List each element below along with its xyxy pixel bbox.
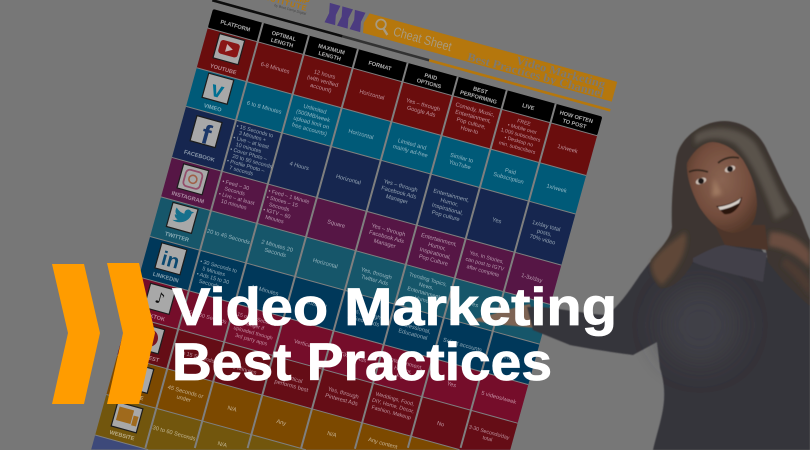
row: facebook cells: Yes – through bbox=[383, 179, 418, 194]
purple chevrons bbox=[325, 3, 366, 32]
face bbox=[687, 142, 757, 233]
platform labels: WEBSITE bbox=[109, 430, 135, 443]
row: instagram cells: Pop Culture bbox=[418, 254, 449, 268]
row: linkedin cells bbox=[194, 259, 523, 373]
platform labels: VIMEO bbox=[203, 103, 223, 114]
row: tiktok cells: uploaded through bbox=[233, 325, 273, 342]
icon: vimeo bbox=[202, 73, 234, 105]
row: linkedin cells: Horizontal bbox=[301, 298, 327, 311]
orange banner: Cheat Sheet bbox=[392, 24, 454, 54]
row: vimeo cells: Paid bbox=[504, 168, 517, 177]
row: facebook cells: 10 minutes bbox=[235, 142, 262, 155]
row: instagram cells: Facebook Ads bbox=[368, 230, 405, 245]
platform icons bbox=[111, 34, 245, 433]
platform labels: MOBILE bbox=[121, 391, 144, 402]
row: website cells bbox=[152, 423, 228, 450]
row: linkedin cells: Seconds bbox=[198, 279, 220, 290]
row: tiktok cells: 3rd party apps bbox=[234, 333, 268, 348]
row: linkedin cells: LinkedIn Ads bbox=[347, 314, 380, 329]
row: instagram cells: Square bbox=[326, 219, 346, 230]
row: twitter cells: Yes, through bbox=[360, 267, 392, 281]
row: youtube cells: Horizontal bbox=[359, 89, 385, 102]
row: instagram cells: after complete bbox=[466, 264, 500, 279]
row: twitter cells: Trending Topics, bbox=[408, 272, 448, 288]
row: twitter cells: Humor bbox=[414, 295, 431, 305]
row: tiktok cells: 5 videos/week bbox=[480, 391, 517, 406]
row: youtube cells: Google Ads bbox=[406, 105, 436, 119]
row: instagram cells: • IGTV – 60 bbox=[262, 207, 291, 221]
grid lines bbox=[95, 9, 602, 450]
icon: linkedin bbox=[155, 243, 187, 275]
orange banner bbox=[361, 13, 617, 103]
row: tiktok cells: Entertainment, bbox=[386, 356, 424, 372]
row: instagram cells: • Live – at least bbox=[218, 191, 255, 207]
row: facebook cells: Pop culture bbox=[431, 210, 460, 223]
row: orange cells: N/A bbox=[227, 405, 237, 414]
header row: BEST bbox=[472, 86, 489, 96]
row: facebook cells: 20 to 90 seconds bbox=[232, 154, 273, 170]
title: Best Practices bbox=[172, 333, 552, 392]
header row: TO POST bbox=[562, 118, 587, 131]
row: facebook cells: • Cover Photo – bbox=[229, 147, 267, 163]
platform labels: TIKTOK bbox=[144, 312, 165, 323]
row: twitter cells: 3-5x/day bbox=[509, 312, 532, 324]
collar bbox=[693, 245, 767, 282]
platform labels: YOUTUBE bbox=[209, 63, 237, 77]
title bbox=[172, 278, 617, 392]
row: vimeo cells: Similar to bbox=[449, 153, 474, 165]
row: youtube cells: How-to bbox=[460, 125, 479, 136]
header row: LENGTH bbox=[318, 51, 341, 63]
row: linkedin cells: Educational bbox=[398, 328, 428, 342]
row: vimeo cells: Unlimited bbox=[303, 104, 327, 116]
row: twitter cells bbox=[204, 217, 535, 333]
arrow: right chevron bbox=[107, 263, 155, 404]
row: vimeo cells bbox=[244, 89, 571, 203]
icon: twitter bbox=[166, 202, 198, 233]
logo: by Boot Camp Digital bbox=[274, 3, 307, 16]
row: instagram cells: • Stories – 15 bbox=[266, 195, 298, 209]
row: instagram cells: • Feed – 30 bbox=[221, 179, 250, 192]
row: tiktok cells: Vertical bbox=[293, 339, 313, 349]
row: youtube cells: • Mobile over bbox=[507, 122, 538, 136]
row: facebook cells: 4 Hours bbox=[289, 161, 310, 172]
header row: FORMAT bbox=[368, 60, 392, 73]
icon: tiktok: ♪ bbox=[153, 288, 167, 308]
row: youtube cells: Comedy, Music, bbox=[455, 102, 495, 119]
row: tiktok cells: 15 to 60 Seconds bbox=[185, 309, 227, 326]
icon: youtube bbox=[213, 34, 245, 65]
row: vimeo cells: Subscription bbox=[493, 172, 524, 186]
row: vimeo cells: YouTube bbox=[448, 160, 471, 171]
platform labels: LINKEDIN bbox=[152, 272, 179, 285]
icon: instagram bbox=[177, 164, 209, 195]
row: pinterest cells: Weddings, Food, bbox=[375, 391, 415, 408]
icon: linkedin: in bbox=[159, 248, 182, 274]
row: facebook cells: • Profile Photo – bbox=[226, 158, 265, 174]
hair bbox=[650, 121, 810, 306]
row: orange cells bbox=[165, 382, 398, 450]
cheat sheet poster bbox=[88, 0, 618, 450]
row: facebook cells: Yes bbox=[491, 217, 502, 225]
icon: mobile video bbox=[122, 362, 154, 393]
row: facebook cells: 1x/day total bbox=[531, 220, 561, 233]
row: instagram cells: Minutes bbox=[265, 215, 285, 225]
row: youtube cells: Pop culture, bbox=[456, 117, 487, 131]
row: twitter cells: 2 Minutes 20 bbox=[260, 239, 293, 254]
row: facebook cells: 70% video bbox=[529, 234, 556, 247]
row: orange cells: 45 Seconds or bbox=[167, 385, 204, 400]
row: vimeo cells: upload limit on bbox=[293, 116, 330, 131]
icon: pinterest bbox=[133, 323, 165, 354]
platform labels: PINTEREST bbox=[128, 350, 160, 364]
row: tiktok cells: 15 or 60 Seconds bbox=[236, 312, 277, 328]
row: facebook cells: Humor, bbox=[440, 198, 459, 208]
row: facebook cells: 7 seconds bbox=[228, 165, 254, 178]
header row: OPTIONS bbox=[416, 78, 442, 91]
row: youtube cells: min. subscribers bbox=[498, 140, 536, 156]
orange banner: Video Marketing bbox=[515, 55, 607, 91]
row: vimeo cells: mainly ad-free bbox=[392, 144, 428, 159]
icon: facebook bbox=[189, 116, 222, 152]
row: vimeo cells: 6 to 8 Minutes bbox=[246, 101, 282, 116]
row: pinterest cells: DIY, Home, Decor, bbox=[371, 398, 415, 415]
row: vimeo cells: Limited and bbox=[397, 138, 427, 152]
row: tiktok cells: Yes bbox=[446, 381, 457, 389]
row: instagram cells: 1-3x/day bbox=[520, 273, 543, 285]
row: pinterest cells: Vertical bbox=[283, 374, 303, 385]
platform labels: INSTAGRAM bbox=[171, 191, 205, 206]
row: website cells: N/A bbox=[217, 441, 228, 449]
row: website cells: 30 to 60 Seconds bbox=[152, 425, 196, 443]
platform labels bbox=[105, 63, 240, 444]
row: tiktok cells: TikTok Ads bbox=[339, 351, 367, 365]
header row: LIVE bbox=[521, 103, 535, 112]
header row: LENGTH bbox=[270, 38, 294, 50]
row: twitter cells: Seconds bbox=[264, 248, 287, 259]
icon: tiktok bbox=[144, 283, 176, 314]
row: facebook cells: • Live – at least bbox=[233, 135, 270, 151]
row: youtube cells: 6-8 Minutes bbox=[260, 62, 290, 76]
platform labels: TWITTER bbox=[164, 231, 190, 244]
mouth bbox=[716, 197, 742, 214]
row: youtube cells: (with verified bbox=[306, 75, 339, 89]
row: pinterest cells: Yes, through bbox=[327, 386, 359, 401]
row: youtube cells: • Desktop no bbox=[504, 135, 534, 149]
arrow: left chevron bbox=[52, 264, 100, 404]
row: youtube cells: FREE bbox=[516, 118, 532, 128]
row: facebook cells: Inspirational, bbox=[431, 203, 464, 217]
icon: website bbox=[111, 402, 143, 433]
row: instagram cells: Yes – through bbox=[371, 223, 406, 238]
row: youtube cells: Entertainment, bbox=[454, 109, 492, 125]
row: twitter cells: News, bbox=[418, 282, 435, 292]
eyebrows bbox=[689, 157, 739, 172]
icon: facebook: f bbox=[198, 119, 216, 151]
row: pinterest cells: Pinterest Ads bbox=[324, 393, 358, 408]
row: linkedin cells: • Ads 15 to 30 bbox=[196, 271, 230, 286]
row: youtube cells: 1,000 subscribers bbox=[500, 127, 541, 144]
row: twitter cells: Twitter Ads bbox=[360, 274, 389, 287]
icon: magnifier bbox=[374, 18, 391, 35]
row: youtube cells bbox=[257, 48, 582, 167]
row: vimeo cells: Horizontal bbox=[348, 129, 374, 141]
row: orange cells: N/A bbox=[326, 431, 337, 439]
row: linkedin cells: 10 Minutes bbox=[250, 284, 279, 298]
icon: vimeo: v bbox=[208, 76, 228, 104]
row: linkedin cells: Professional, bbox=[398, 321, 432, 336]
nose bbox=[712, 178, 722, 197]
row: linkedin cells: 5x/week bbox=[499, 353, 521, 364]
row: pinterest cells: Fashion, Makeup bbox=[371, 405, 412, 421]
platform labels: FACEBOOK bbox=[183, 150, 215, 164]
row: linkedin cells: 5 Minutes bbox=[201, 266, 226, 278]
chest shading bbox=[660, 285, 740, 365]
row: facebook cells: 3 Minutes + bbox=[238, 130, 267, 144]
row: vimeo cells: free accounts) bbox=[291, 122, 327, 138]
row: instagram cells: Seconds bbox=[224, 186, 246, 198]
row: tiktok cells: Fun bbox=[395, 373, 407, 382]
eyes bbox=[695, 176, 707, 186]
header row: MAXIMUM bbox=[317, 43, 346, 57]
row: twitter cells: Yes bbox=[468, 301, 479, 309]
row: linkedin cells: Select accounts bbox=[442, 337, 483, 354]
header row: PERFORMING bbox=[459, 90, 497, 106]
row: vimeo cells: (500MB/week bbox=[295, 109, 331, 124]
top rule bbox=[212, 0, 611, 112]
row: instagram cells: Inspirational, bbox=[419, 247, 452, 261]
title: Video Marketing bbox=[172, 278, 617, 337]
hand bbox=[470, 304, 536, 328]
row: instagram cells: Humor, bbox=[427, 242, 447, 253]
row: pinterest cells bbox=[175, 337, 512, 449]
row: facebook cells: Facebook Ads bbox=[380, 185, 417, 201]
header row bbox=[218, 17, 593, 132]
row: pinterest cells: 15 Minutes bbox=[229, 363, 257, 377]
row: instagram cells: can post to IGTV bbox=[465, 256, 505, 273]
row: facebook cells: Horizontal bbox=[335, 174, 361, 187]
header row: HOW OFTEN bbox=[559, 110, 593, 125]
person bbox=[470, 121, 810, 450]
row: linkedin cells: Yes, through bbox=[349, 307, 381, 322]
row: instagram cells: Entertainment, bbox=[420, 233, 458, 249]
row: twitter cells: 20 to 45 Seconds bbox=[206, 229, 251, 246]
row: facebook cells: Manager bbox=[385, 194, 408, 206]
neck bbox=[715, 225, 768, 250]
row: tiktok cells bbox=[182, 298, 520, 416]
chevron arrows bbox=[52, 263, 155, 404]
row: orange cells: Any bbox=[276, 419, 287, 427]
row: youtube cells: 12 hours bbox=[313, 69, 336, 81]
header row: OPTIMAL bbox=[271, 31, 297, 43]
row: pinterest cells: total bbox=[482, 435, 493, 443]
row: orange cells: under bbox=[176, 394, 191, 404]
row: vimeo cells: 1x/week bbox=[546, 183, 567, 195]
row: youtube cells: account) bbox=[309, 83, 332, 94]
row: instagram cells: • Feed – 1 Minute bbox=[268, 188, 310, 206]
row: youtube cells: Yes – through bbox=[405, 98, 441, 113]
hair streaks bbox=[652, 128, 810, 296]
row: tiktok cells: longer if bbox=[245, 321, 265, 332]
row: facebook cells: Entertainment, bbox=[432, 188, 470, 204]
row: youtube cells: 1x/week bbox=[556, 144, 578, 155]
row: facebook cells bbox=[225, 124, 565, 260]
row: tiktok cells: Humor, bbox=[393, 365, 413, 376]
row: instagram cells: Manager bbox=[373, 238, 396, 250]
row: facebook cells: posts, bbox=[536, 228, 553, 238]
header row: PAID bbox=[424, 73, 438, 82]
row: pinterest cells: 6 to 15 Seconds bbox=[176, 349, 215, 365]
row: pinterest cells: performs best bbox=[274, 379, 309, 394]
row: instagram cells: Yes, In Stories, bbox=[469, 250, 504, 266]
orange banner: Best Practices by Channel bbox=[466, 51, 605, 100]
table rows bbox=[91, 9, 602, 450]
row: linkedin cells: • 30 Seconds to bbox=[199, 259, 237, 275]
row: pinterest cells: No bbox=[436, 421, 445, 429]
row: instagram cells bbox=[215, 176, 547, 296]
row: pinterest cells: 3-30 Seconds/day bbox=[468, 424, 510, 441]
row: twitter cells: Horizontal bbox=[312, 258, 338, 270]
row: facebook cells: • 15 Seconds to bbox=[236, 124, 274, 140]
header row: PLATFORM bbox=[220, 20, 251, 34]
row: instagram cells: Seconds bbox=[268, 202, 290, 214]
row: instagram cells: 10 minutes bbox=[220, 199, 247, 212]
torso and arm bbox=[527, 240, 810, 450]
row: twitter cells: Entertainment, bbox=[406, 286, 442, 301]
